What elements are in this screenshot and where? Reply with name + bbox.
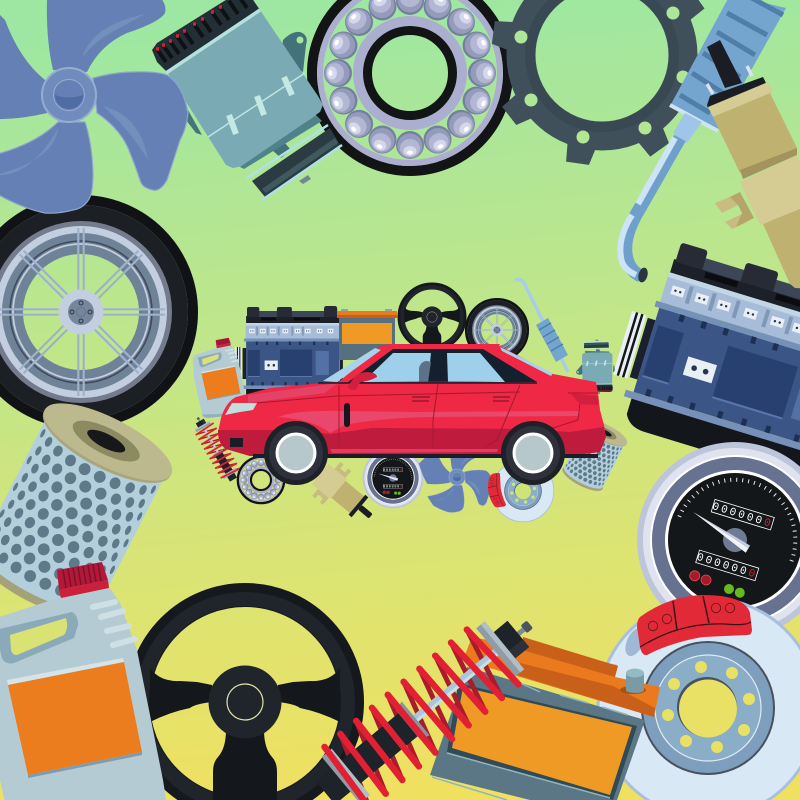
icon: brake disc (598, 598, 800, 800)
taillight (570, 393, 598, 405)
icon: ignition coil top right (707, 40, 800, 290)
windshield (323, 348, 381, 382)
icon: tire left (0, 193, 200, 431)
hood shine (248, 383, 338, 403)
belt line (318, 382, 537, 384)
icon: cooling fan top left (0, 0, 188, 213)
underbody (253, 454, 598, 458)
icon: exhaust pipe and muffler (620, 0, 786, 283)
mini shock absorber (189, 412, 243, 484)
window frame (347, 349, 537, 383)
sill (330, 449, 498, 453)
front vent (230, 438, 243, 447)
mini ignition coil (306, 457, 385, 533)
mini alternator (561, 330, 634, 405)
rear side window (447, 353, 505, 382)
rear wheel (501, 421, 565, 485)
icon: brake disc shadow (621, 625, 649, 659)
car body (218, 344, 606, 456)
side slot (344, 403, 350, 427)
rear glass (500, 347, 553, 376)
icon: shock absorber bottom (303, 597, 555, 800)
icon: brake pad (637, 595, 752, 655)
mini exhaust pipe (515, 279, 568, 372)
roof strip (378, 344, 500, 348)
icon: car battery bottom (430, 637, 660, 800)
mini steering wheel (401, 286, 463, 348)
icon: ball bearing top (312, 0, 508, 171)
side mirror (348, 372, 377, 390)
mini fan (419, 447, 493, 512)
icon: oil jug bottom left (0, 562, 168, 800)
mini speedometer (363, 448, 423, 508)
mini engine block (235, 306, 344, 403)
icon: engine control block right (599, 233, 800, 490)
body shine (278, 411, 580, 433)
mini parts behind car (189, 279, 634, 533)
icon: gear ring top right (489, 0, 714, 168)
icon: alternator top (152, 0, 342, 200)
headlight (225, 403, 257, 415)
front side window (363, 353, 431, 382)
front wheel (264, 421, 328, 485)
door handles (412, 397, 510, 401)
icon: oil filter left (0, 388, 182, 633)
red car (218, 344, 606, 485)
mini oil filter (558, 415, 630, 496)
mini bearing (238, 457, 284, 503)
mini battery (337, 309, 397, 360)
icon: steering wheel bottom (138, 595, 352, 800)
lower body shade (218, 427, 606, 456)
driver silhouette (419, 361, 431, 382)
mini brake pad (488, 473, 506, 507)
door lines (257, 382, 600, 447)
icon: speedometer right (613, 418, 800, 662)
mini brake disc (492, 460, 554, 522)
mini oil jug (193, 338, 248, 418)
mini tire (464, 297, 530, 363)
